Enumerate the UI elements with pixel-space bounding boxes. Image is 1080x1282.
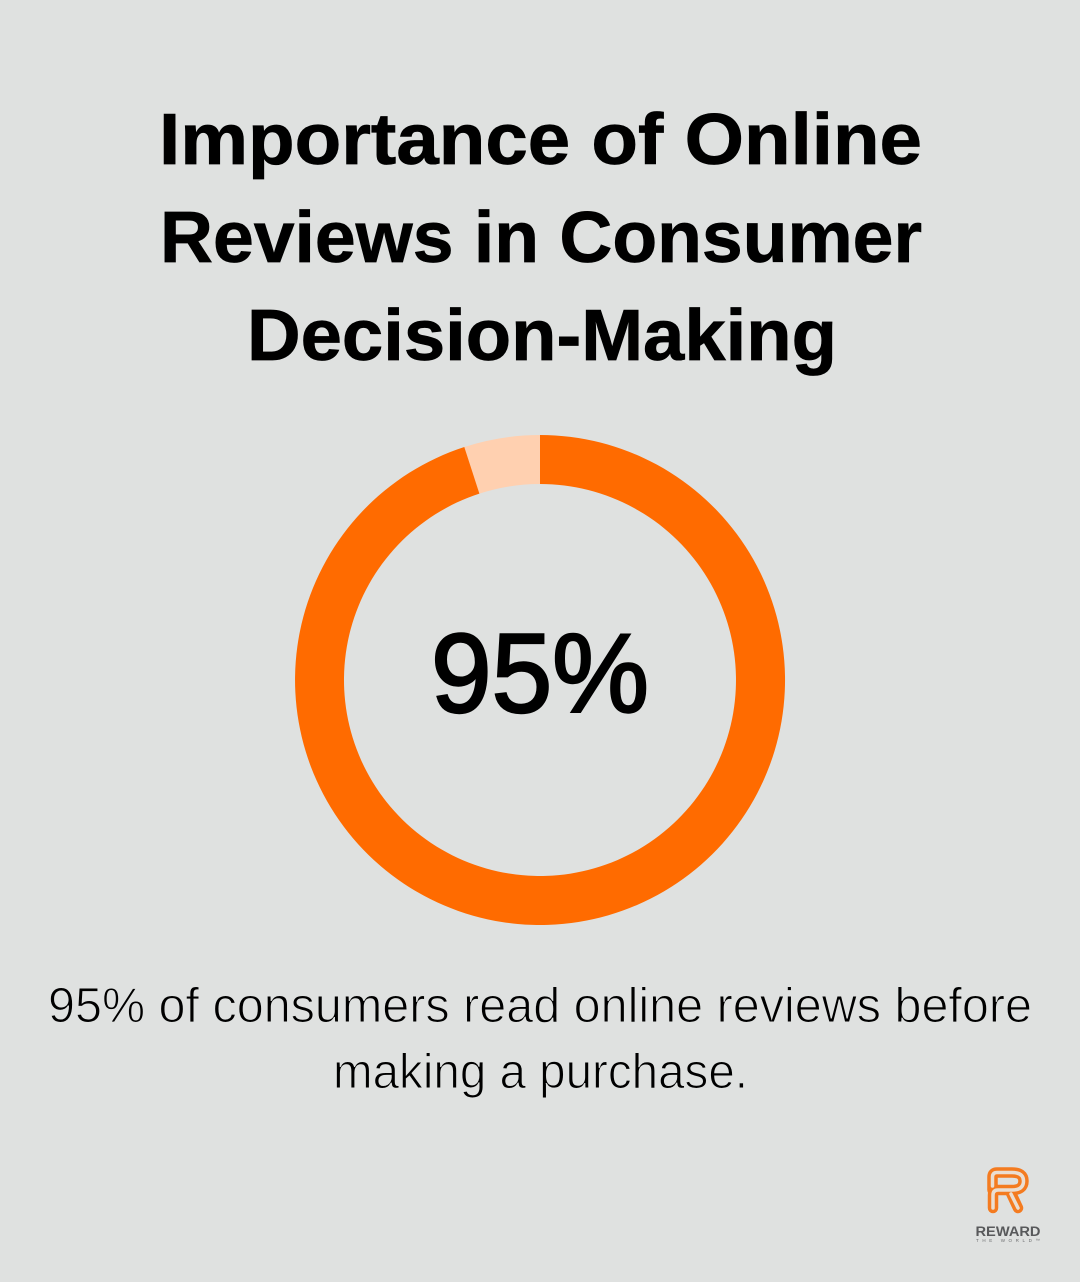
title: Decision-Making bbox=[247, 296, 837, 376]
donut centre value: 95% bbox=[431, 611, 649, 736]
donut segment: remaining 5% bbox=[464, 435, 540, 494]
donut chart: 95% bbox=[295, 435, 785, 925]
description text bbox=[48, 979, 1032, 1099]
description text: making a purchase. bbox=[333, 1045, 748, 1099]
icon: R mark bbox=[992, 1172, 1024, 1208]
title: Reviews in Consumer bbox=[160, 198, 922, 278]
logo tagline: THE WORLD™ bbox=[976, 1238, 1040, 1243]
donut segment: 95% bbox=[295, 435, 785, 925]
title: Importance of Online bbox=[159, 100, 922, 180]
logo: Reward the World bbox=[976, 1172, 1041, 1243]
logo wordmark: REWARD bbox=[976, 1224, 1041, 1239]
description text: 95% of consumers read online reviews before bbox=[48, 979, 1032, 1033]
title bbox=[159, 100, 922, 376]
